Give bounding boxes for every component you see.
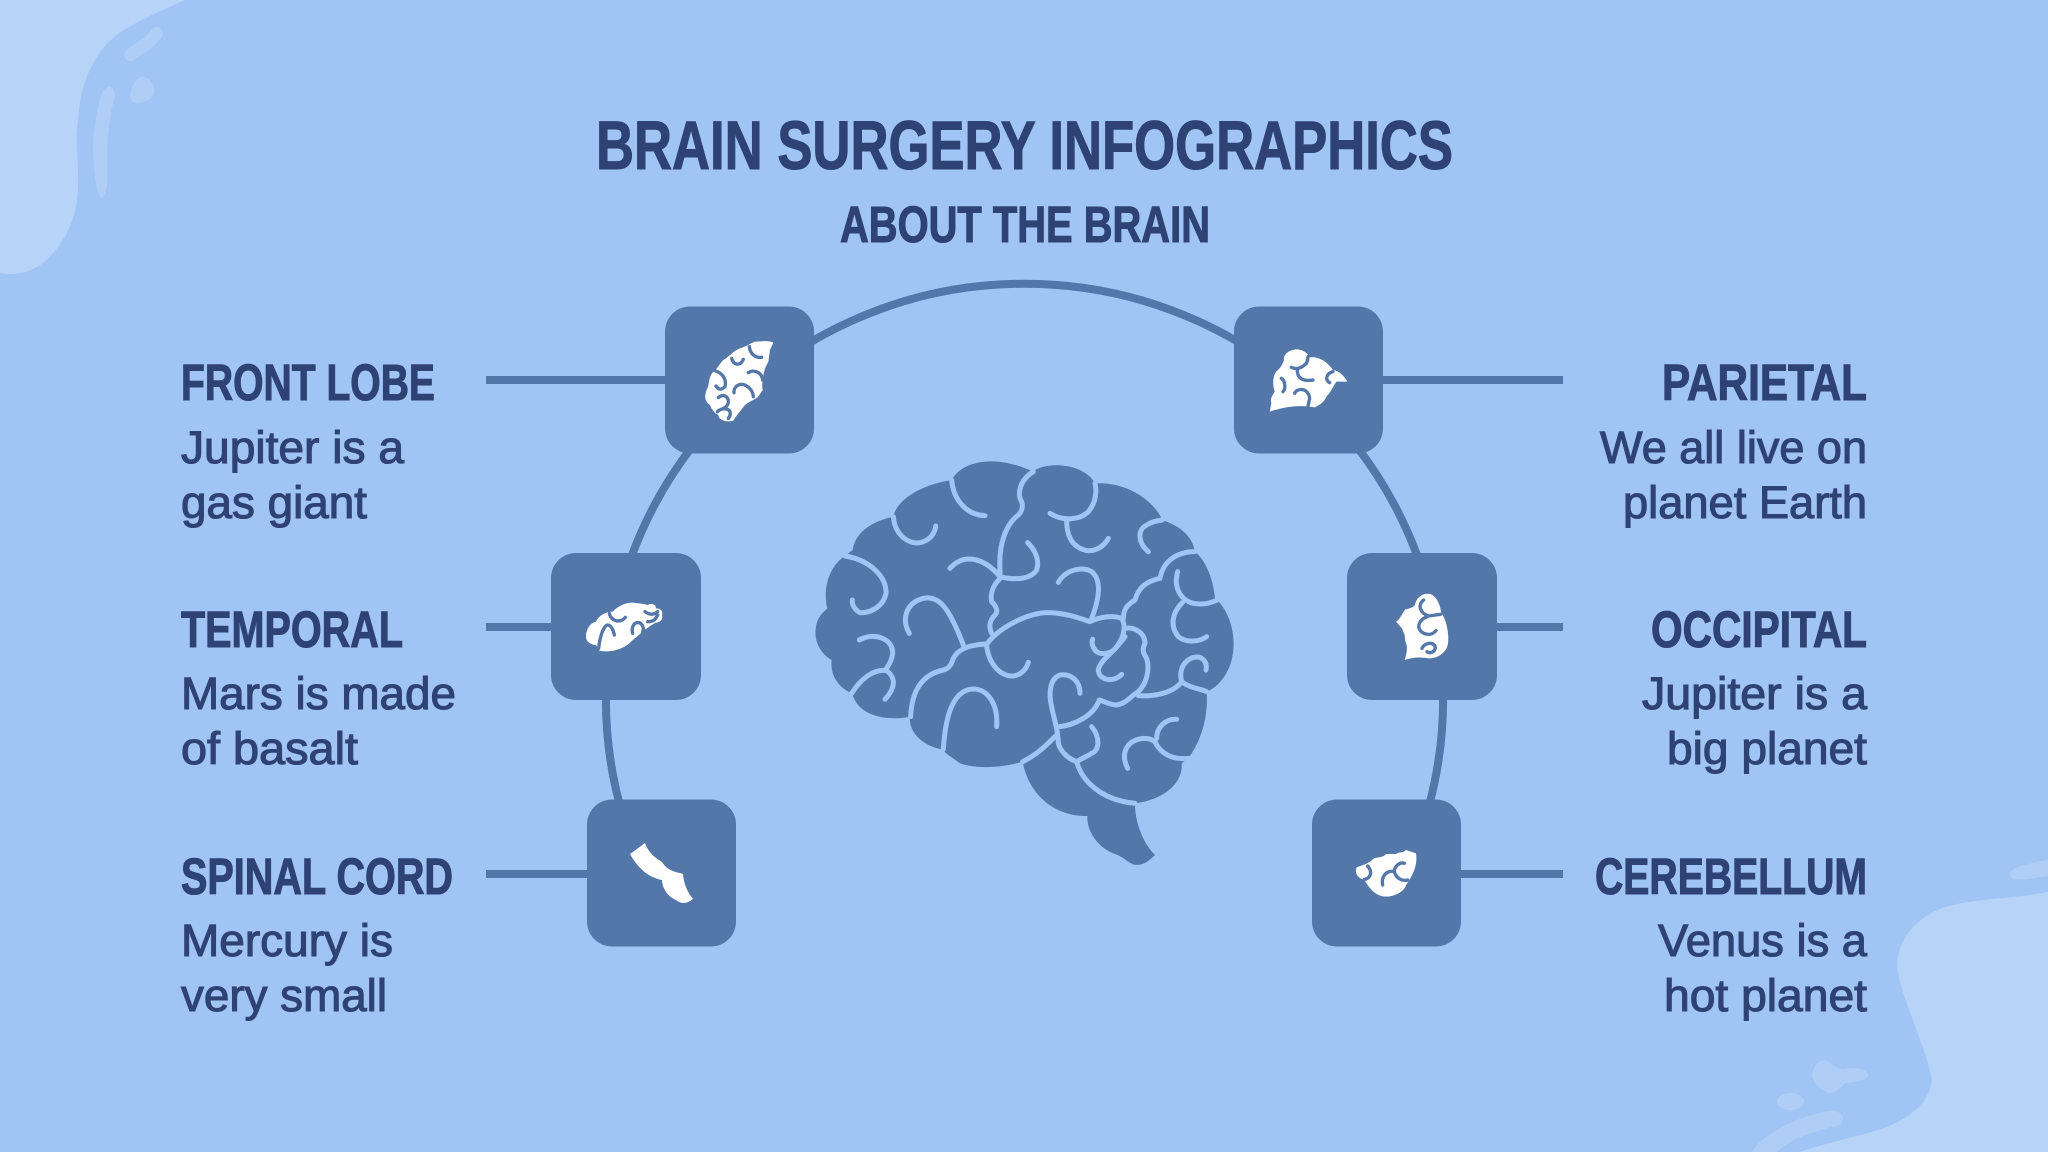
connector arc xyxy=(606,284,1443,802)
decorative blob: top left xyxy=(0,0,185,274)
text block: occipital: OCCIPITAL xyxy=(1651,601,1867,658)
text block: cerebellum xyxy=(1595,848,1868,1021)
central brain illustration xyxy=(815,461,1234,865)
connector lines right xyxy=(1378,380,1563,874)
text block: cerebellum: CEREBELLUM xyxy=(1595,848,1867,905)
text block: occipital: Jupiter is a xyxy=(1642,668,1868,719)
icon box: front lobe xyxy=(665,306,814,454)
text block: temporal xyxy=(181,601,456,774)
subtitle: ABOUT THE BRAIN xyxy=(840,196,1210,253)
text block: front lobe: gas giant xyxy=(181,477,368,528)
text block: occipital: big planet xyxy=(1667,723,1867,774)
text block: spinal cord xyxy=(181,848,453,1021)
text block: temporal: TEMPORAL xyxy=(181,601,403,658)
text block: front lobe xyxy=(181,354,435,528)
text block: spinal cord: SPINAL CORD xyxy=(181,848,453,905)
text block: temporal: of basalt xyxy=(181,723,359,774)
icon box: occipital xyxy=(1347,553,1497,700)
text block: spinal cord: Mercury is xyxy=(181,915,393,966)
text block: parietal: PARIETAL xyxy=(1662,354,1867,411)
text block: parietal: We all live on xyxy=(1600,422,1867,473)
icon: cerebellum xyxy=(1356,850,1416,897)
text block: temporal: Mars is made xyxy=(181,668,456,719)
text block: parietal: planet Earth xyxy=(1623,477,1867,528)
text block: front lobe: Jupiter is a xyxy=(181,422,405,473)
icon: front lobe xyxy=(705,341,773,421)
connector lines left xyxy=(486,380,670,874)
text block: cerebellum: Venus is a xyxy=(1658,915,1868,966)
text block: spinal cord: very small xyxy=(181,970,387,1021)
icon: parietal lobe xyxy=(1270,349,1347,412)
text block: front lobe: FRONT LOBE xyxy=(181,354,435,411)
title: BRAIN SURGERY INFOGRAPHICS xyxy=(596,107,1453,184)
text block: parietal xyxy=(1600,354,1867,528)
icon: spinal cord xyxy=(630,843,693,903)
icon: occipital lobe xyxy=(1396,594,1448,660)
decorative blob: bottom right xyxy=(1752,859,2048,1152)
icon box: temporal xyxy=(551,553,701,700)
icon box: cerebellum xyxy=(1312,800,1461,946)
icon: temporal lobe xyxy=(586,603,662,651)
icon box: spinal cord xyxy=(587,800,736,946)
text block: cerebellum: hot planet xyxy=(1664,970,1868,1021)
icon box: parietal xyxy=(1234,306,1383,454)
text block: occipital xyxy=(1642,601,1868,774)
